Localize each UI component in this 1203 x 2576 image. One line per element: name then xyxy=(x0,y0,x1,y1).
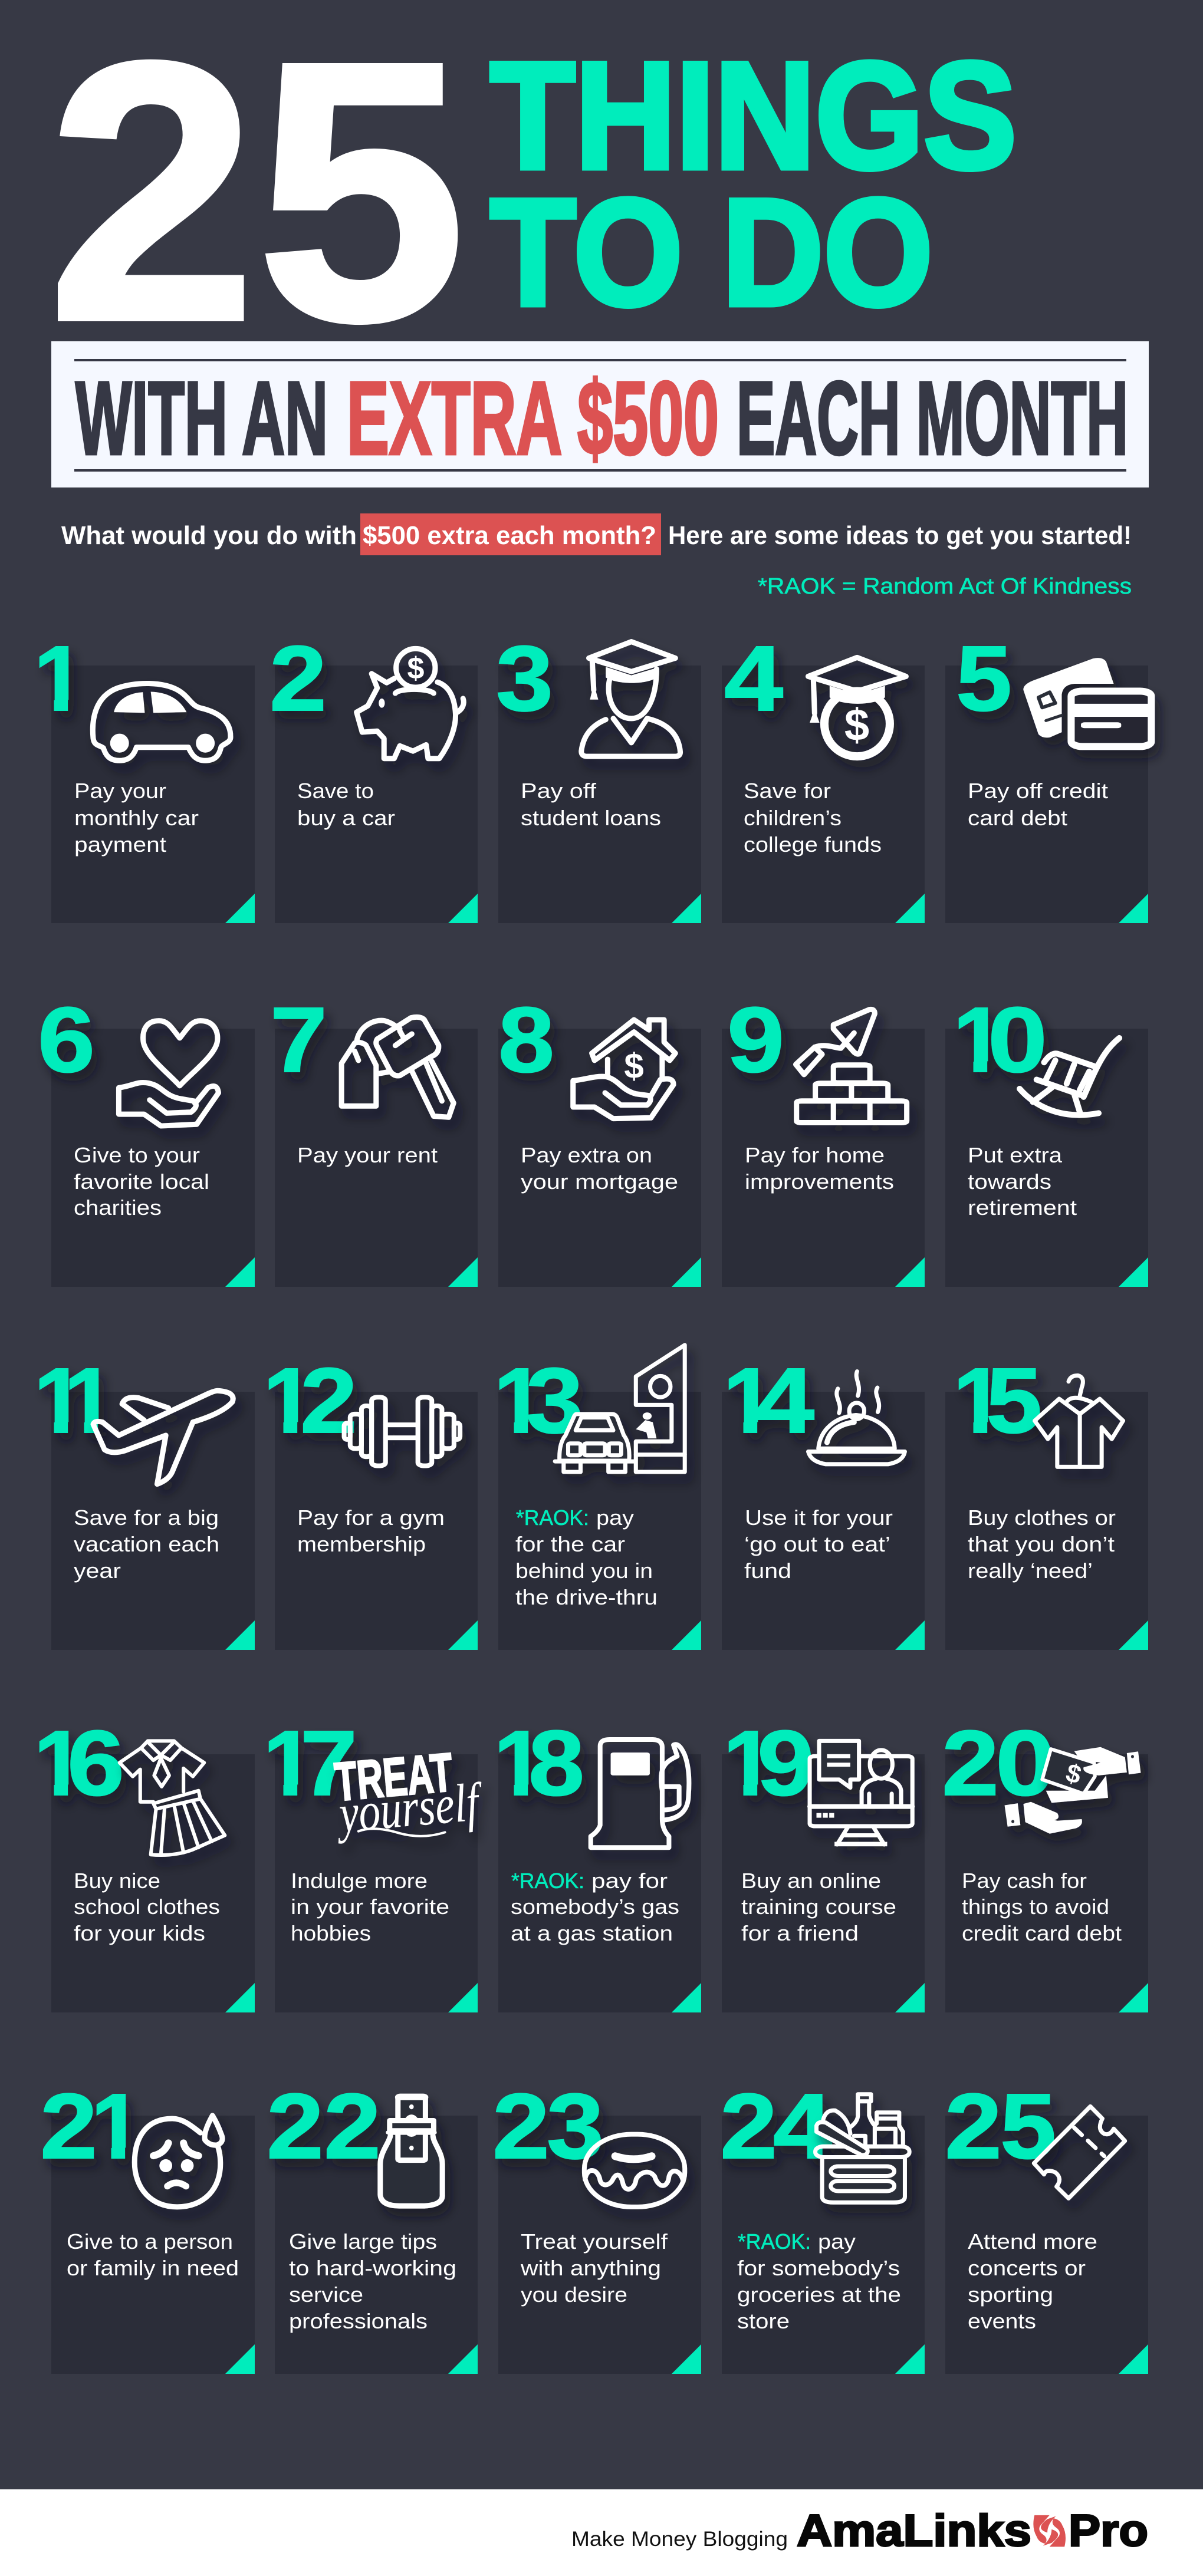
description: Pay off xyxy=(521,779,597,803)
number 22: 2 xyxy=(324,2075,381,2178)
icon: donut xyxy=(584,2134,685,2207)
number 18 xyxy=(494,1712,584,1815)
description: professionals xyxy=(289,2309,428,2333)
icon: car xyxy=(93,683,231,760)
card 22 xyxy=(267,2075,478,2374)
description: for somebody’s xyxy=(737,2256,900,2280)
description xyxy=(511,1869,679,1945)
icon: graduate xyxy=(581,642,681,756)
description: or family in need xyxy=(67,2256,239,2280)
number 10 xyxy=(959,1006,1051,1083)
number 11 xyxy=(39,1368,109,1443)
description: vacation each xyxy=(74,1532,219,1556)
number 17 xyxy=(263,1712,357,1815)
description xyxy=(521,779,661,830)
title line THINGS: THINGS xyxy=(490,30,1017,200)
description: events xyxy=(968,2309,1036,2333)
description xyxy=(744,779,882,857)
number 15 xyxy=(959,1368,1047,1444)
number 16 xyxy=(39,1730,129,1807)
description xyxy=(968,2229,1097,2333)
number 12: 2 xyxy=(300,1349,357,1452)
icon: piggy bank: $ xyxy=(407,651,425,686)
icon: rocking chair xyxy=(1020,1038,1119,1115)
card 23 xyxy=(492,2075,701,2374)
description: Attend more xyxy=(968,2229,1097,2254)
description: Treat yourself xyxy=(521,2229,668,2254)
number 7: 7 xyxy=(270,989,327,1092)
card 21 xyxy=(40,2075,255,2374)
icon: car at drive-thru xyxy=(555,1345,685,1472)
intro sentence: $500 extra each month? xyxy=(363,521,656,550)
description: Pay for a gym xyxy=(297,1506,445,1530)
RAOK legend: *RAOK = Random Act Of Kindness xyxy=(758,574,1132,599)
tagline: Make Money Blogging xyxy=(571,2528,788,2551)
description: buy a car xyxy=(297,806,395,830)
description: college funds xyxy=(744,832,882,857)
icon: heart in hand xyxy=(119,1021,218,1126)
description: Pay your rent xyxy=(297,1143,438,1167)
number 20: 2 xyxy=(942,1712,999,1815)
description: Pay your xyxy=(74,779,166,803)
description xyxy=(297,1506,445,1556)
description: somebody’s gas xyxy=(511,1895,679,1919)
number 14: 1 xyxy=(723,1349,774,1452)
number 8: 8 xyxy=(498,989,554,1092)
card 6 xyxy=(38,989,255,1287)
number 18: 8 xyxy=(528,1712,584,1815)
number 13 xyxy=(499,1367,587,1444)
description: in your favorite xyxy=(291,1895,449,1919)
description: at a gas station xyxy=(511,1921,673,1945)
description xyxy=(962,1869,1122,1945)
card 10 xyxy=(945,989,1148,1287)
description: Give large tips xyxy=(289,2229,437,2254)
description: for the car xyxy=(515,1532,625,1556)
description xyxy=(289,2229,456,2333)
number 2: 2 xyxy=(269,627,327,730)
card 25 xyxy=(945,2075,1148,2374)
number 19 xyxy=(723,1712,814,1815)
description: Save for xyxy=(744,779,831,803)
description xyxy=(521,1143,678,1194)
card 19 xyxy=(722,1712,925,2012)
description xyxy=(968,779,1108,830)
card 4 xyxy=(722,627,925,923)
description: fund xyxy=(744,1559,791,1583)
description: charities xyxy=(74,1195,162,1220)
card 13 xyxy=(494,1345,701,1650)
icon: serving dish xyxy=(808,1371,905,1464)
description: groceries at the xyxy=(737,2282,901,2307)
icon: credit cards xyxy=(1023,658,1151,746)
description xyxy=(74,779,199,857)
number 4: 4 xyxy=(724,627,783,730)
number 18: 1 xyxy=(494,1712,545,1815)
description: sporting xyxy=(968,2282,1053,2307)
number 10: 0 xyxy=(988,989,1047,1092)
number 1: 1 xyxy=(34,627,85,730)
description xyxy=(520,2229,668,2307)
number 11: 1 xyxy=(34,1349,85,1452)
description: pay xyxy=(596,1506,634,1530)
card 3 xyxy=(496,627,701,923)
description: for your kids xyxy=(74,1921,205,1945)
description: monthly car xyxy=(74,806,199,830)
description: Use it for your xyxy=(745,1506,893,1530)
number 19: 9 xyxy=(757,1712,814,1815)
logo link icon xyxy=(1033,2515,1066,2547)
icon: school uniform xyxy=(120,1741,225,1855)
description: Buy nice xyxy=(74,1869,160,1893)
description: children’s xyxy=(744,806,842,830)
description: that you don’t xyxy=(968,1532,1115,1556)
logo wordmark: AmaLinks xyxy=(797,2506,1031,2556)
number 21: 2 xyxy=(40,2075,97,2178)
icon: grocery basket xyxy=(816,2094,909,2202)
number 24: 4 xyxy=(773,2075,832,2178)
description: with anything xyxy=(520,2256,661,2280)
description: to hard-working xyxy=(289,2256,456,2280)
card 11 xyxy=(34,1349,255,1650)
description: behind you in xyxy=(515,1559,653,1583)
number 12: 1 xyxy=(263,1349,314,1452)
icon: worried face xyxy=(134,2116,222,2207)
icon: treat yourself lettering xyxy=(333,1742,486,1844)
description xyxy=(297,779,395,830)
number 13: 1 xyxy=(494,1349,545,1452)
number 14 xyxy=(729,1368,821,1443)
card 12 xyxy=(263,1349,478,1650)
description: *RAOK: xyxy=(511,1869,584,1893)
number 17: 7 xyxy=(300,1712,357,1815)
number 21: 1 xyxy=(91,2075,142,2178)
icon: treat yourself lettering: yourself xyxy=(333,1771,486,1844)
description: Put extra xyxy=(968,1143,1063,1167)
number 25 xyxy=(945,2075,1056,2178)
description: membership xyxy=(297,1532,426,1556)
number 24: 2 xyxy=(720,2075,777,2178)
number 23: 3 xyxy=(547,2075,604,2178)
number 23: 2 xyxy=(492,2075,550,2178)
number 14: 4 xyxy=(755,1349,814,1452)
description xyxy=(744,1506,893,1583)
number 12 xyxy=(269,1367,362,1444)
number 16: 1 xyxy=(34,1712,85,1815)
description: Buy clothes or xyxy=(968,1506,1116,1530)
card 24 xyxy=(720,2075,925,2374)
number 23 xyxy=(492,2075,604,2178)
description xyxy=(515,1506,658,1609)
description: Indulge more xyxy=(291,1869,428,1893)
icon: airplane xyxy=(93,1391,233,1484)
number 21 xyxy=(40,2075,142,2178)
number 5: 5 xyxy=(956,627,1012,730)
number 17: 1 xyxy=(263,1712,314,1815)
icon: house in hand xyxy=(573,1020,675,1119)
title xyxy=(47,0,1017,397)
description xyxy=(968,1143,1077,1220)
description: *RAOK: xyxy=(738,2229,811,2254)
icon: house in hand: $ xyxy=(624,1046,644,1086)
description: Save to xyxy=(297,779,374,803)
description: your mortgage xyxy=(521,1170,678,1194)
icon: trowel and bricks xyxy=(796,1009,907,1123)
icon: hands exchanging cash xyxy=(1005,1747,1140,1834)
number 15: 5 xyxy=(986,1349,1042,1452)
description xyxy=(67,2229,239,2280)
description: retirement xyxy=(968,1195,1077,1220)
description xyxy=(745,1143,894,1194)
description: student loans xyxy=(521,806,661,830)
description: concerts or xyxy=(968,2256,1086,2280)
description: you desire xyxy=(521,2282,627,2307)
description: credit card debt xyxy=(962,1921,1122,1945)
description: for a friend xyxy=(741,1921,859,1945)
icon: graduation cap with coin xyxy=(808,657,906,756)
description: things to avoid xyxy=(962,1895,1109,1919)
logo wordmark pro: Pro xyxy=(1069,2506,1148,2556)
card 20 xyxy=(942,1712,1148,2012)
card 16 xyxy=(34,1712,255,2012)
description: year xyxy=(74,1559,121,1583)
number 6: 6 xyxy=(38,989,95,1092)
title line TO DO: TO DO xyxy=(490,167,933,337)
description: pay for xyxy=(591,1869,668,1893)
headline: extra $500: EXTRA $500 xyxy=(347,361,719,476)
icon: piggy bank xyxy=(357,648,464,759)
headline banner xyxy=(51,341,1149,487)
description xyxy=(74,1506,219,1583)
number 24 xyxy=(720,2075,832,2178)
number 3: 3 xyxy=(496,627,553,730)
description: towards xyxy=(968,1170,1051,1194)
description: payment xyxy=(74,832,166,857)
description: Pay off credit xyxy=(968,779,1108,803)
icon: gas pump xyxy=(591,1740,689,1847)
description: Give to your xyxy=(74,1143,200,1167)
number 22 xyxy=(267,2075,381,2178)
description: hobbies xyxy=(291,1921,371,1945)
number 19: 1 xyxy=(723,1712,774,1815)
headline: with an: WITH AN xyxy=(75,361,328,476)
description xyxy=(737,2229,901,2333)
description: ‘go out to eat’ xyxy=(744,1532,890,1556)
description: really ‘need’ xyxy=(968,1559,1093,1583)
card 7 xyxy=(270,989,478,1287)
description xyxy=(968,1506,1116,1583)
number 10: 1 xyxy=(953,989,1004,1092)
icon: graduation cap with coin: $ xyxy=(844,700,869,750)
icon: dumbbell xyxy=(344,1397,460,1466)
number 13: 3 xyxy=(526,1349,583,1452)
description: *RAOK: xyxy=(516,1506,589,1530)
description: Save for a big xyxy=(74,1506,219,1530)
intro sentence: Here are some ideas to get you started! xyxy=(668,521,1132,550)
intro sentence xyxy=(61,513,1132,555)
intro sentence: What would you do with xyxy=(61,521,357,550)
number 15: 1 xyxy=(953,1349,1004,1452)
icon: online training monitor xyxy=(810,1741,912,1846)
number 11: 1 xyxy=(64,1349,115,1452)
number 20 xyxy=(942,1712,1056,1815)
description: favorite local xyxy=(74,1170,209,1194)
description: Pay extra on xyxy=(521,1143,652,1167)
description: Give to a person xyxy=(67,2229,233,2254)
description: the drive-thru xyxy=(515,1585,658,1609)
card 2 xyxy=(269,627,478,923)
card 18 xyxy=(494,1712,701,2012)
description: Pay for home xyxy=(745,1143,885,1167)
description: school clothes xyxy=(74,1895,220,1919)
description xyxy=(74,1143,209,1220)
card 9 xyxy=(722,989,925,1287)
card 5 xyxy=(945,627,1151,923)
card 14 xyxy=(722,1349,925,1650)
description: Buy an online xyxy=(741,1869,881,1893)
icon: hands exchanging cash: $ xyxy=(1063,1758,1084,1790)
icon: tip jar xyxy=(380,2096,442,2206)
number 9: 9 xyxy=(727,989,784,1092)
description: improvements xyxy=(745,1170,894,1194)
number 25: 5 xyxy=(1000,2075,1056,2178)
description: service xyxy=(289,2282,363,2307)
description: card debt xyxy=(968,806,1067,830)
card 1 xyxy=(34,627,255,923)
number 22: 2 xyxy=(267,2075,324,2178)
icon: keys and tag xyxy=(341,1017,453,1117)
description xyxy=(741,1869,896,1945)
icon: treat yourself lettering: TREAT xyxy=(333,1742,455,1813)
number 25: 2 xyxy=(945,2075,1002,2178)
description xyxy=(291,1869,449,1945)
description xyxy=(74,1869,220,1945)
card 15 xyxy=(945,1349,1148,1650)
footer xyxy=(0,2489,1203,2576)
description: training course xyxy=(741,1895,896,1919)
description: Pay cash for xyxy=(962,1869,1087,1893)
description: store xyxy=(737,2309,790,2333)
description: pay xyxy=(818,2229,856,2254)
number 20: 0 xyxy=(995,1712,1056,1815)
number 16: 6 xyxy=(67,1712,124,1815)
card 8 xyxy=(498,989,701,1287)
icon: ticket xyxy=(1034,2106,1125,2198)
card 17 xyxy=(263,1712,486,2012)
icon: shirt on hanger xyxy=(1035,1375,1123,1467)
